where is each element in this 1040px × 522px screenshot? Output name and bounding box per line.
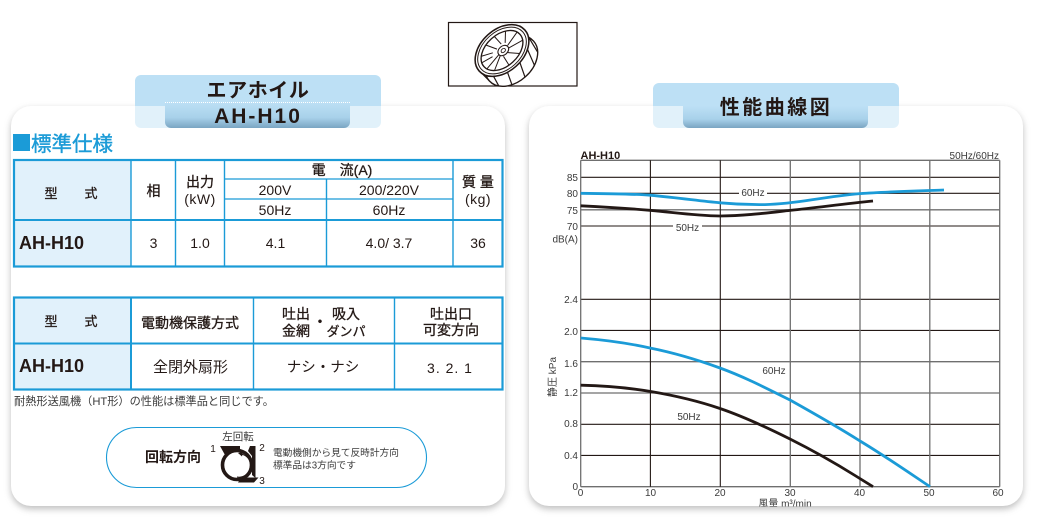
- spec table 1: 出力: [186, 174, 214, 190]
- y axis labels: 80: [567, 189, 578, 200]
- spec table 2: 吐出口: [430, 306, 472, 322]
- y axis labels: 2.4: [564, 295, 578, 306]
- spec table 1: [14, 160, 503, 267]
- spec table 2: 電動機保護方式: [141, 315, 239, 331]
- rotation direction callout: 2: [259, 443, 265, 454]
- x axis labels: [578, 489, 1004, 506]
- heading tab: product name: AH-H10: [214, 105, 302, 128]
- y axis labels: [546, 173, 578, 493]
- spec table 1: 式: [84, 186, 98, 201]
- x axis labels: 10: [645, 488, 656, 499]
- spec table 1: 200/220V: [359, 182, 420, 198]
- rotation direction callout: 標準品は3方向です: [273, 458, 356, 472]
- y axis labels: dB(A): [552, 234, 578, 246]
- rotation direction callout: 3: [259, 476, 265, 487]
- curve labels: 60Hz: [762, 366, 786, 377]
- curve labels: 60Hz: [741, 188, 765, 199]
- spec table 1: 4.1: [266, 235, 285, 251]
- spec table 2: ・: [313, 314, 327, 330]
- curve: pressure 60Hz: [581, 338, 930, 487]
- curve labels: 50Hz: [676, 223, 699, 234]
- spec table 1: 3: [150, 235, 158, 251]
- x axis labels: 60: [992, 488, 1004, 499]
- spec table 2: ナシ・ナシ: [287, 360, 359, 376]
- curve labels: 50Hz: [677, 412, 701, 423]
- spec table 1: AH-H10: [19, 233, 84, 253]
- y axis labels: 0: [572, 482, 578, 493]
- rotation direction callout: [106, 428, 426, 488]
- y axis labels: 70: [567, 222, 578, 233]
- y axis labels: 0.4: [564, 451, 578, 462]
- rotation direction callout: 電動機側から見て反時計方向: [273, 446, 399, 459]
- x axis labels: 30: [784, 488, 796, 499]
- x axis labels: 風量 m³/min: [758, 498, 812, 510]
- spec table 1: 1.0: [190, 235, 210, 251]
- curve: pressure 50Hz: [581, 385, 873, 487]
- y axis labels: 75: [567, 206, 578, 217]
- rotation direction callout: 左回転: [222, 430, 254, 443]
- heading tab: performance curve chart: [653, 83, 899, 128]
- performance chart: [546, 150, 1004, 510]
- rotation direction callout: 回転方向: [145, 449, 201, 465]
- spec table 2: AH-H10: [19, 356, 84, 376]
- y axis labels: 1.6: [564, 359, 578, 370]
- spec table 2: 吸入: [332, 306, 360, 322]
- spec table 2: ダンパ: [326, 324, 366, 339]
- rotation direction callout: 1: [210, 444, 216, 455]
- panel: performance curves: [529, 83, 1023, 510]
- section heading: 標準仕様: [31, 133, 113, 156]
- spec table 2: [14, 297, 503, 390]
- spec table 2: 全閉外扇形: [153, 359, 228, 376]
- x axis labels: 50: [923, 488, 935, 499]
- spec table 2: 式: [84, 314, 98, 329]
- spec table 1: 200V: [259, 182, 292, 198]
- spec table 1: 型: [44, 186, 58, 201]
- spec table 1: 50Hz: [259, 202, 291, 218]
- y axis labels: 静圧 kPa: [546, 357, 559, 397]
- curve: noise 50Hz: [581, 201, 873, 216]
- spec table 1: 質 量: [462, 174, 494, 190]
- y axis labels: 0.8: [564, 419, 578, 430]
- note text: 耐熱形送風機（HT形）の性能は標準品と同じです。: [14, 394, 274, 408]
- x axis labels: 0: [578, 488, 584, 499]
- icon: rotation diagram: [220, 446, 258, 482]
- x axis labels: 20: [714, 488, 726, 499]
- performance chart: 50Hz/60Hz: [950, 151, 999, 162]
- spec table 2: 吐出: [282, 306, 310, 322]
- spec table 1: 60Hz: [373, 202, 405, 218]
- y axis labels: 2.0: [564, 327, 578, 338]
- curve: noise 60Hz: [581, 190, 944, 205]
- y axis labels: 85: [567, 173, 578, 184]
- curve labels: [673, 188, 786, 423]
- x axis labels: 40: [854, 488, 865, 499]
- panel: standard specifications: [11, 75, 505, 509]
- spec table 1: 相: [146, 183, 160, 199]
- spec table 2: 型: [44, 314, 58, 329]
- spec table 1: 電 流(A): [312, 162, 372, 178]
- heading tab: performance curve chart: 性能曲線図: [720, 96, 832, 119]
- y axis labels: 1.2: [564, 388, 578, 399]
- spec table 2: 金網: [282, 323, 310, 339]
- spec table 1: 36: [470, 235, 486, 251]
- spec table 2: 可変方向: [423, 322, 479, 338]
- spec table 1: 4.0/ 3.7: [366, 235, 413, 251]
- heading tab: product name: エアホイル: [206, 80, 310, 102]
- spec table 2: 3. 2. 1: [427, 360, 473, 376]
- performance chart: AH-H10: [580, 150, 620, 162]
- product illustration: fan wheel: [448, 14, 577, 97]
- spec table 1: (kg): [465, 191, 491, 207]
- heading tab: product name: [135, 75, 381, 128]
- spec table 1: (kW): [184, 191, 216, 207]
